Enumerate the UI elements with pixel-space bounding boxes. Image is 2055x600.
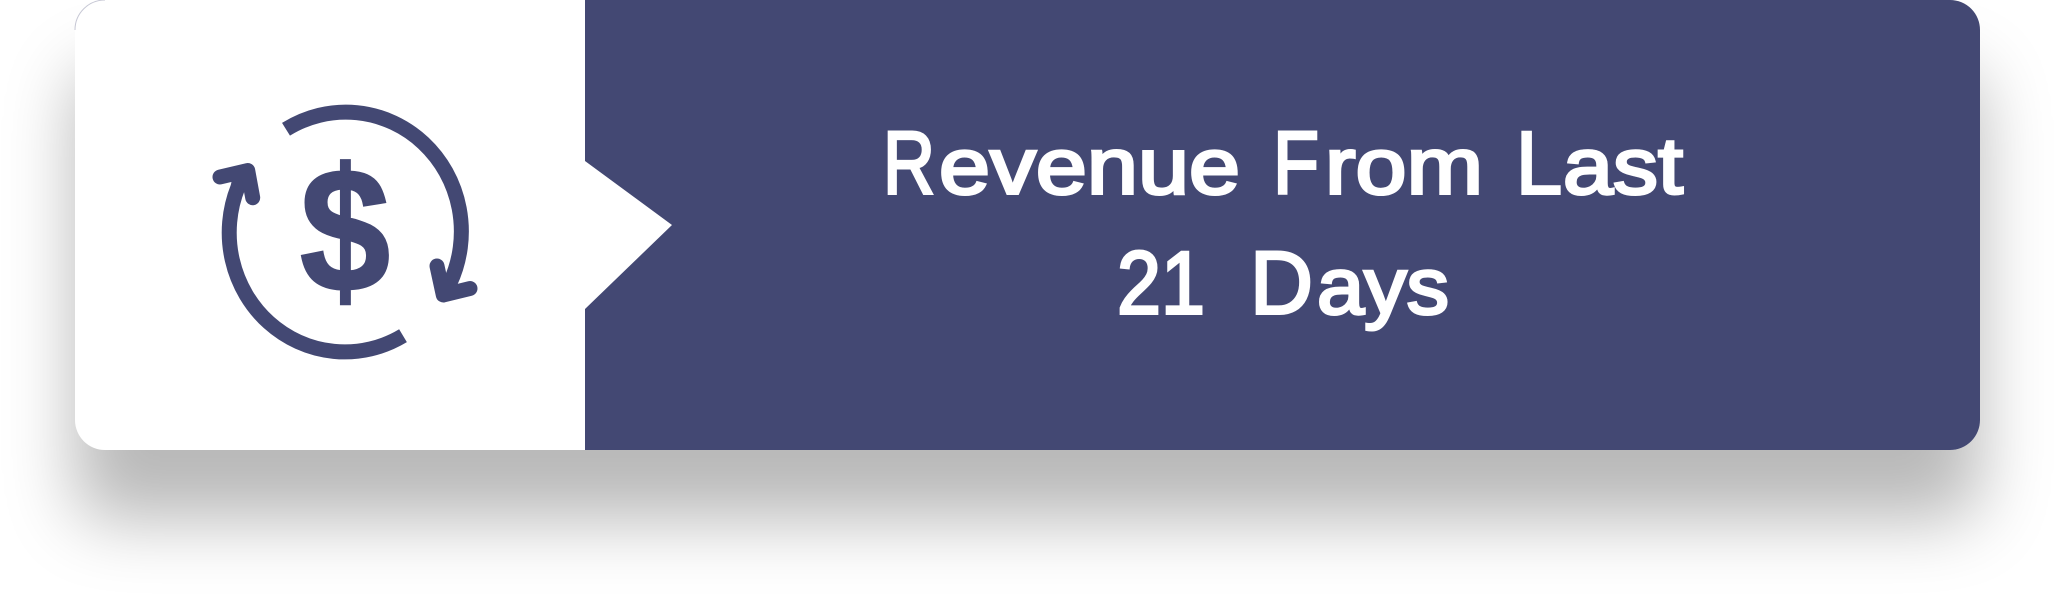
heading line 2: 21: [1117, 232, 1205, 332]
card with drop shadow: [75, 0, 1980, 450]
heading: Revenue From Last 21 Days: [883, 112, 1683, 332]
heading line 1: rom: [1325, 122, 1483, 210]
heading line 2: ays: [1317, 242, 1449, 330]
icon: dollar sign: $: [300, 132, 390, 328]
heading line 1: R: [883, 112, 935, 212]
heading line 1: L: [1516, 112, 1562, 212]
heading line 1: F: [1273, 112, 1319, 212]
heading line 2: D: [1250, 232, 1313, 332]
panel: title banner with notch: [585, 0, 1980, 450]
icon: lower circular arrow: [220, 170, 403, 352]
icon: revenue cycle with dollar sign: [220, 112, 470, 352]
heading line 1: ast: [1563, 122, 1683, 210]
icon: upper circular arrow: [286, 112, 470, 295]
heading line 1: evenue: [939, 122, 1240, 210]
